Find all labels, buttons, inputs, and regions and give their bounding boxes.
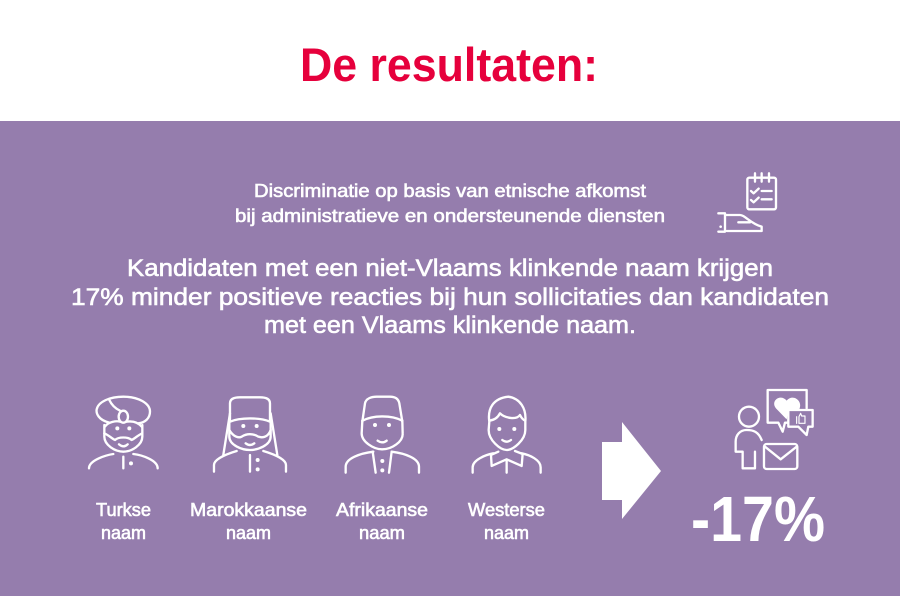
main statement text block: Kandidaten met een niet-Vlaams klinkende naam krijgen: [127, 255, 773, 282]
subtitle text block: Discriminatie op basis van etnische afkomst: [254, 181, 646, 201]
statistic: -17%: -17%: [691, 483, 825, 555]
main statement text block: [71, 255, 829, 339]
label: Marokkaanse naam: [190, 500, 307, 543]
arrow: [602, 422, 661, 519]
icon: person with headscarf and beard: [214, 397, 286, 472]
label: Turkse naam: naam: [101, 523, 146, 543]
label: Turkse naam: Turkse: [96, 500, 151, 520]
panel: purple background: [0, 121, 900, 596]
label: Westerse naam: naam: [484, 523, 529, 543]
icon: checklist and hand: [718, 173, 776, 232]
subtitle text block: [235, 181, 665, 226]
subtitle text block: bij administratieve en ondersteunende diensten: [235, 206, 665, 226]
label: Afrikaanse naam: naam: [359, 523, 405, 543]
main statement text block: 17% minder positieve reacties bij hun sollicitaties dan kandidaten: [71, 284, 829, 311]
label: Turkse naam: [96, 500, 151, 543]
title: De resultaten:: [300, 38, 598, 91]
icon: person with turban: [89, 397, 158, 468]
icon: person with cap: [346, 397, 419, 473]
main statement text block: met een Vlaams klinkende naam.: [264, 312, 636, 339]
label: Westerse naam: [468, 500, 545, 543]
icon: western person: [473, 397, 541, 473]
label: Marokkaanse naam: naam: [226, 523, 271, 543]
label: Afrikaanse naam: Afrikaanse: [336, 500, 428, 520]
label: Marokkaanse naam: Marokkaanse: [190, 500, 307, 520]
label: Westerse naam: Westerse: [468, 500, 545, 520]
icon: person with reactions and envelope: [736, 390, 813, 469]
label: Afrikaanse naam: [336, 500, 428, 543]
